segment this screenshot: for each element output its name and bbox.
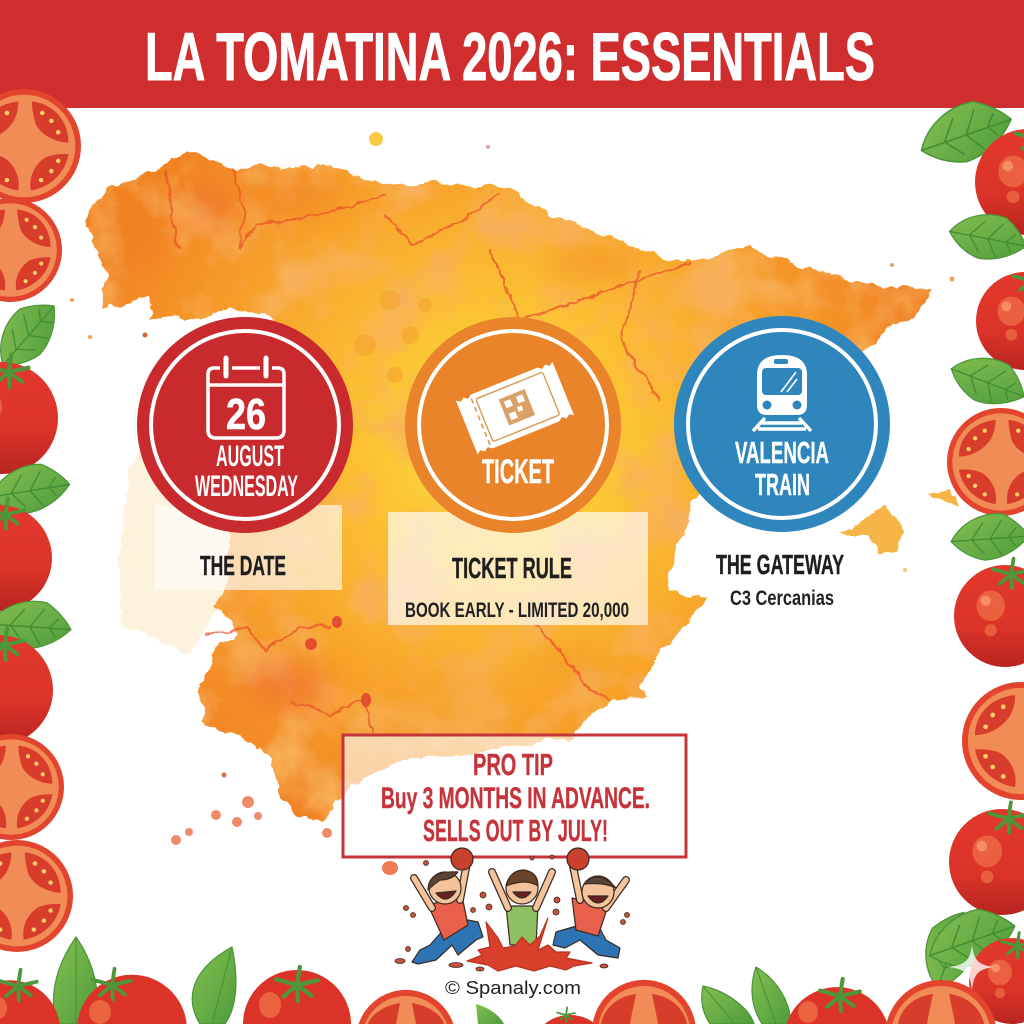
text: August: AUGUST [216,440,284,473]
tomato highlights [0,992,818,1024]
badge: ticket [405,317,621,533]
tomato stems [0,967,860,1022]
text: Wednesday: WEDNESDAY [195,470,298,503]
right tomato border [912,92,1024,1024]
leaf 4 [752,967,790,1024]
leaf 2 [192,947,236,1024]
kid right [553,866,626,958]
note: the gateway: THE GATEWAY [716,549,844,580]
kid left [412,868,483,964]
sparkle watermark [948,945,994,990]
callout heading: PRO TIP [473,747,553,782]
colour washes [119,183,635,715]
note panel: the date [155,505,342,590]
text: book early: BOOK EARLY - LIMITED 20,000 [405,599,629,622]
paint blooms [354,290,432,383]
note: the gateway [716,549,844,610]
calendar day: 26 [226,390,266,439]
bottom tomato border [0,937,996,1024]
badge label: TICKET [482,453,554,491]
callout line two: SELLS OUT BY JULY! [423,813,608,848]
icon: ticket [456,362,574,454]
text: Valencia: VALENCIA [735,435,829,470]
leaf 1 [53,937,98,1024]
label: the date: THE DATE [200,550,286,581]
cut tomato 3 [886,980,996,1024]
left tomato border [0,89,81,952]
text: Train: TRAIN [755,467,810,502]
cut tomato 2 [593,980,695,1024]
label: ticket rule: TICKET RULE [452,553,572,585]
text: C3 Cercanias: C3 Cercanias [730,587,834,610]
tomato 4 [786,987,888,1024]
tomato splat [467,918,592,971]
callout: pro tip [343,735,686,857]
illustration: kids in tomato splat [395,848,630,971]
badge: date [137,317,353,533]
thrown tomatoes [451,848,473,870]
leaf 3 [702,986,754,1024]
Spain mainland [83,150,935,822]
map of Spain, watercolor [70,132,958,875]
icon: calendar [208,358,284,438]
tomato drops [395,855,630,971]
kid middle [492,870,552,945]
cut tomato 1 [359,990,453,1024]
copyright: © Spanaly.com [445,978,581,998]
callout line one: Buy 3 MONTHS IN ADVANCE. [381,782,650,815]
Portugal pale wash [118,325,300,655]
note panel: ticket rule [388,512,648,625]
tomato 1 [0,980,60,1024]
red paint drops [305,616,371,707]
badge: train [674,316,890,532]
title banner [0,0,1024,108]
province borders [165,167,690,735]
paint splashes [70,132,954,875]
icon: train [753,355,811,431]
small leaf [476,1004,504,1024]
tomato 3 [243,970,351,1024]
small tomato [545,1015,595,1024]
tomato 2 [77,975,187,1024]
Balearic islands [840,490,958,553]
